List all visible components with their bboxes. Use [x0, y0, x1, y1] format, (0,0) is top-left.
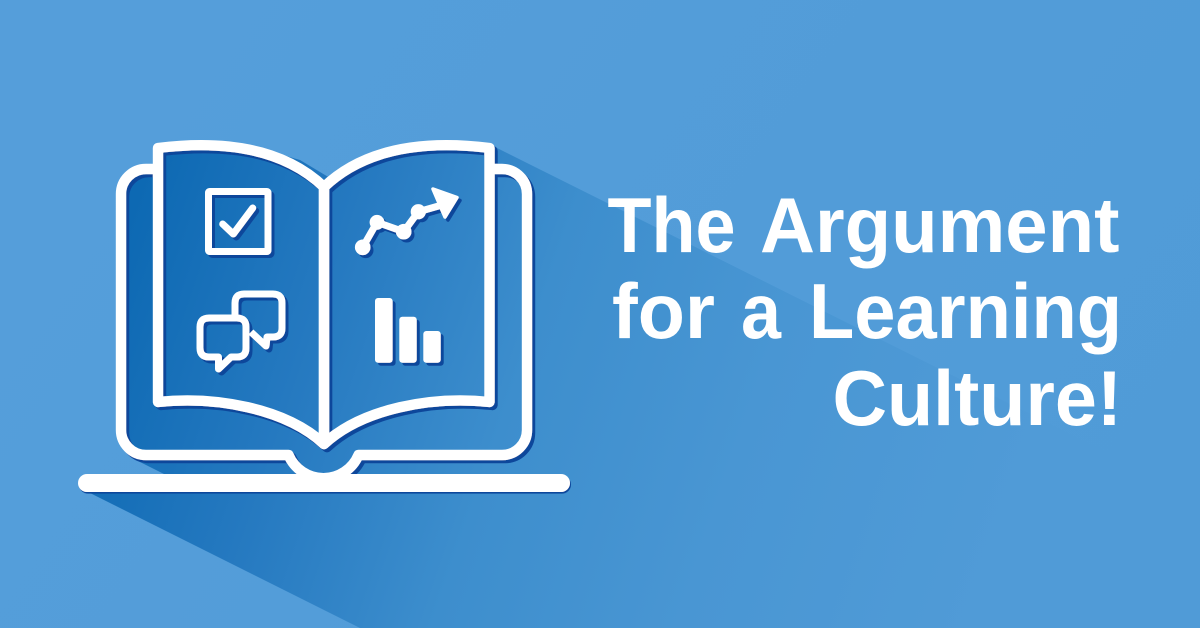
right page [324, 145, 490, 444]
title: a [741, 267, 782, 355]
icon: speech bubbles [200, 294, 282, 369]
long diagonal shadow [86, 144, 1200, 628]
icon: trend line with arrow [355, 189, 457, 255]
back speech bubble [235, 294, 282, 346]
title: The [608, 181, 736, 269]
book outline [121, 145, 527, 478]
title: Culture! [832, 354, 1122, 442]
back cover [121, 169, 527, 478]
icon: checkbox [208, 192, 268, 252]
title [608, 181, 1122, 442]
front speech bubble [200, 318, 246, 369]
icon: open book illustration [87, 145, 561, 483]
title: for [612, 267, 715, 355]
left page [158, 145, 324, 444]
title: Argument [760, 181, 1120, 269]
book stand line [87, 474, 561, 492]
title: Learning [809, 267, 1122, 355]
icon: bar chart [375, 298, 441, 363]
